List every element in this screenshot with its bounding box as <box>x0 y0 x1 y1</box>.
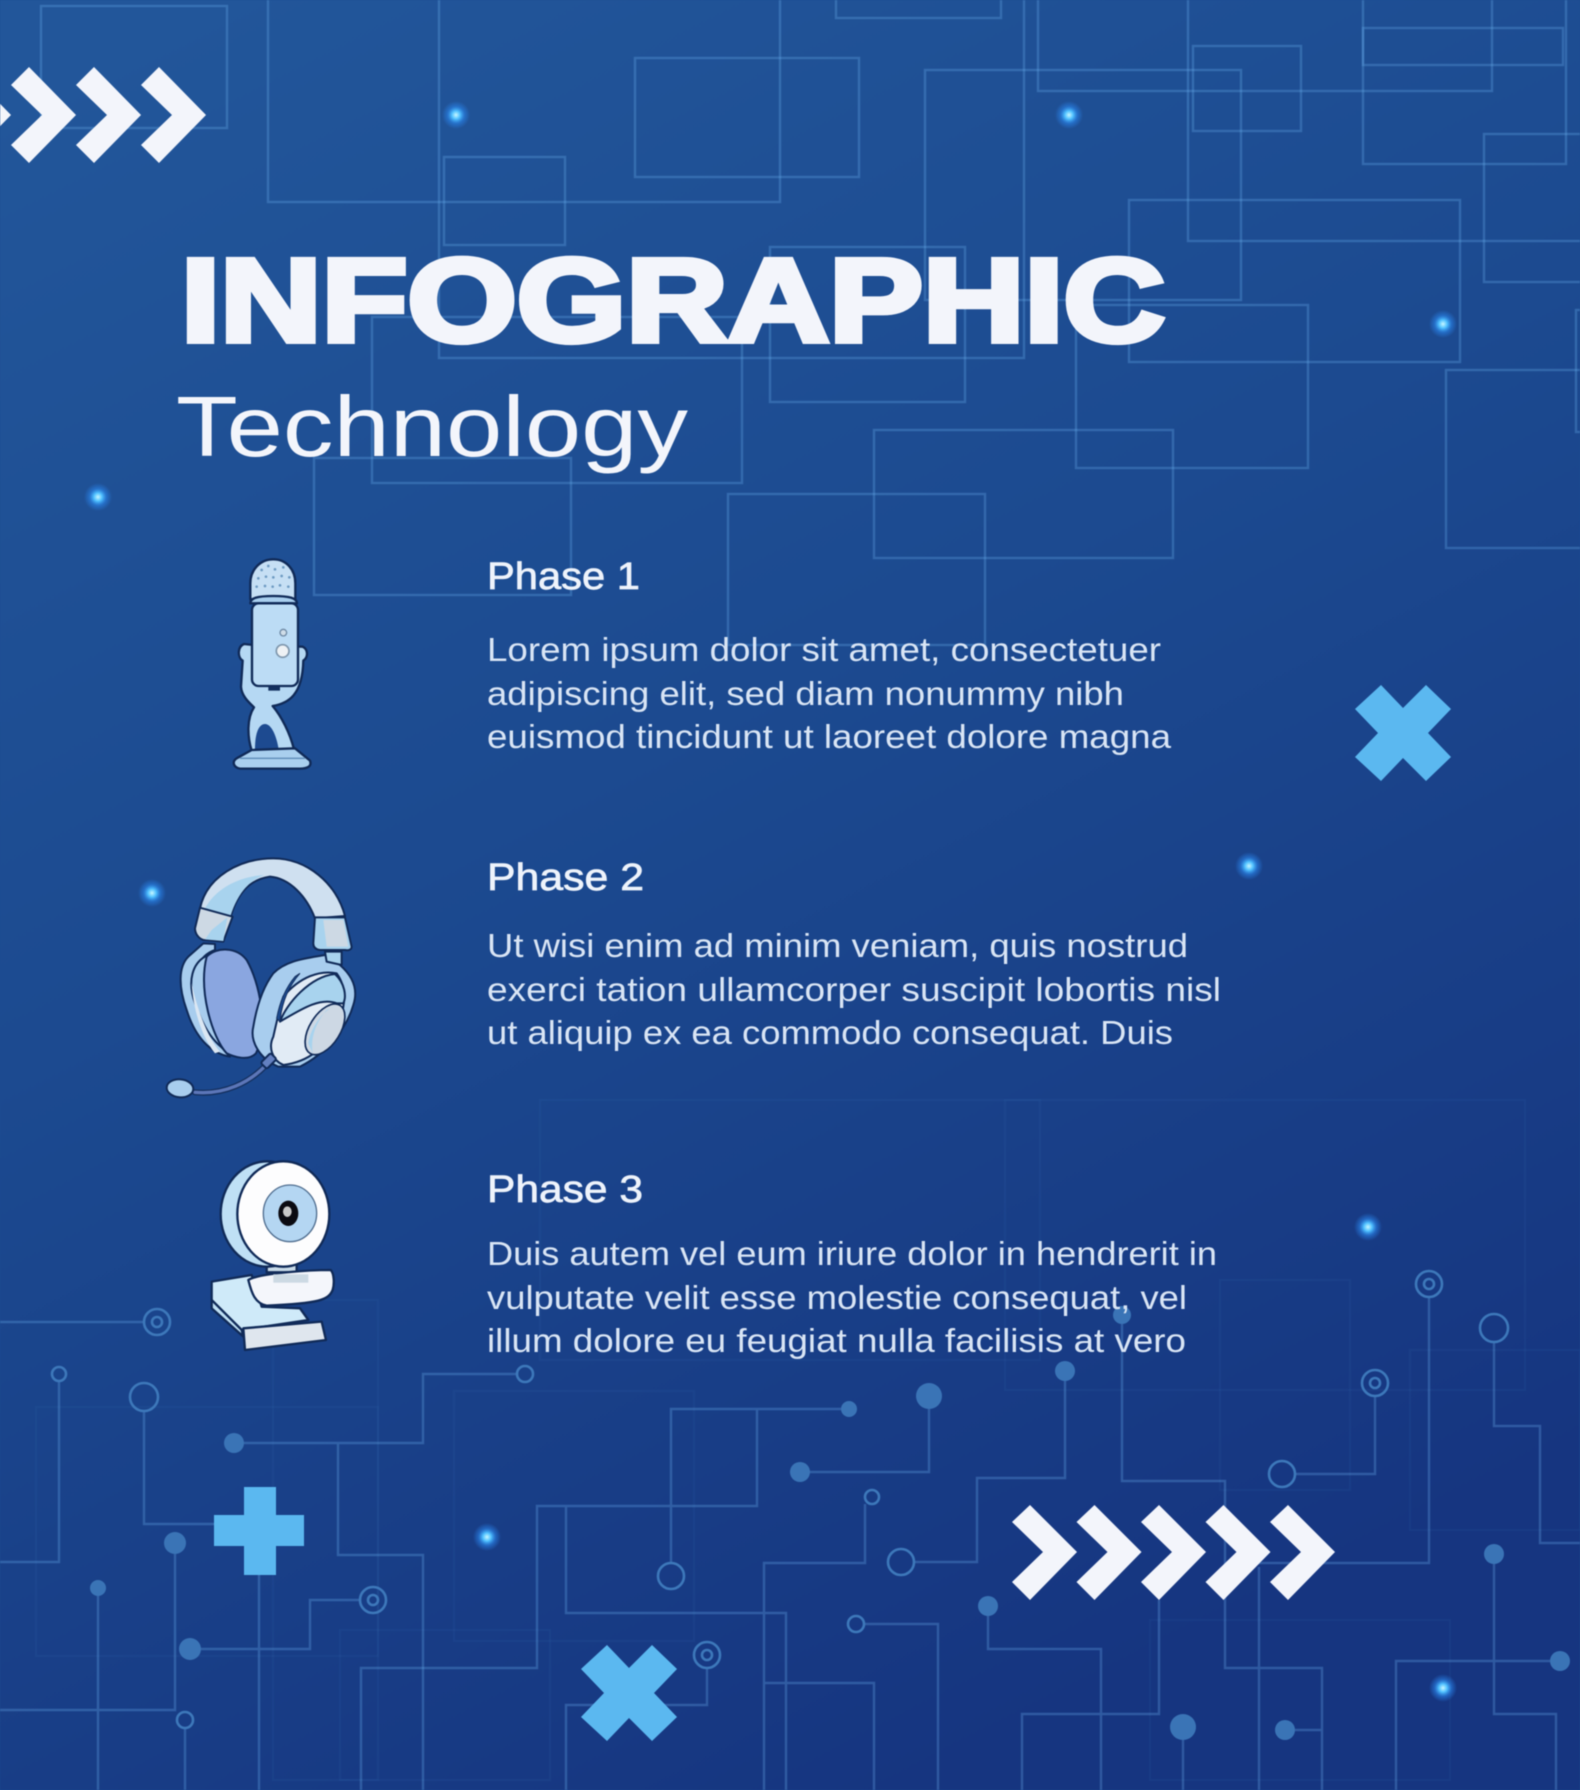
icon: top-left chevron arrows <box>0 67 206 163</box>
phase 2 description <box>487 927 1221 1051</box>
phase 1 description <box>487 631 1172 755</box>
icon: webcam <box>212 1161 334 1350</box>
phase 2 description: ut aliquip ex ea commodo consequat. Duis <box>487 1014 1173 1051</box>
phase 3 description: vulputate velit esse molestie consequat, vel <box>487 1279 1187 1316</box>
phase 2 description: Ut wisi enim ad minim veniam, quis nostrud <box>487 927 1188 964</box>
phase 2 text <box>487 857 1221 1051</box>
phase 1 heading: Phase 1 <box>487 556 640 598</box>
glowing light dots <box>84 101 1457 1702</box>
phase 3 heading: Phase 3 <box>487 1169 643 1211</box>
subtitle: Technology <box>176 380 689 475</box>
icon: headset <box>166 858 355 1098</box>
icon: bottom chevron arrows <box>1012 1505 1335 1600</box>
icon: blue cross right <box>1355 685 1451 781</box>
phase 1 description: Lorem ipsum dolor sit amet, consectetuer <box>487 631 1161 668</box>
icon: blue plus <box>214 1487 304 1575</box>
phase 2 description: exerci tation ullamcorper suscipit lobortis nisl <box>487 971 1221 1008</box>
phase 2 heading: Phase 2 <box>487 857 644 899</box>
phase 1 description: adipiscing elit, sed diam nonummy nibh <box>487 675 1124 712</box>
phase 3 description <box>487 1235 1217 1359</box>
background: faint lower rectangles <box>36 1100 1580 1780</box>
phase 1 description: euismod tincidunt ut laoreet dolore magna <box>487 718 1172 755</box>
icon: microphone <box>234 559 311 769</box>
background: outlined rectangles <box>41 0 1580 645</box>
phase 3 description: illum dolore eu feugiat nulla facilisis at vero <box>487 1322 1186 1359</box>
background: circuit traces <box>0 1271 1580 1790</box>
title: INFOGRAPHIC <box>181 235 1165 367</box>
phase 3 text <box>487 1169 1217 1359</box>
phase 3 description: Duis autem vel eum iriure dolor in hendrerit in <box>487 1235 1217 1272</box>
phase 1 text <box>487 556 1172 755</box>
icon: blue cross bottom <box>581 1645 677 1741</box>
